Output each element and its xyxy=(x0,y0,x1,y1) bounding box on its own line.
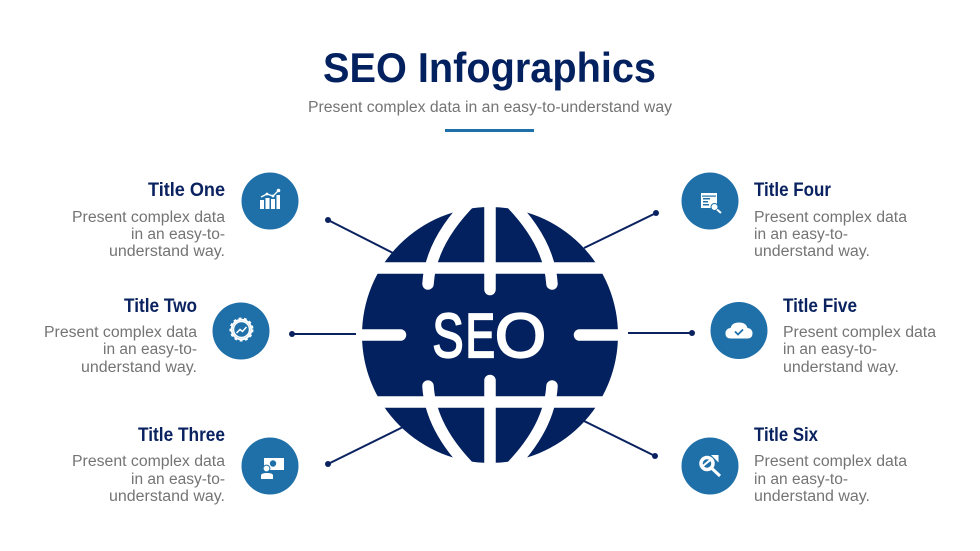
globe with SEO label xyxy=(350,200,630,470)
item: title four xyxy=(754,179,907,260)
icon: magnifier with arrow xyxy=(682,438,738,494)
body text: Present complex data xyxy=(754,453,907,470)
body text xyxy=(783,324,936,376)
connector: title four xyxy=(584,210,659,248)
heading: Title Six xyxy=(754,424,818,446)
subtitle: Present complex data in an easy-to-understand way xyxy=(308,99,672,116)
body text: Present complex data xyxy=(44,324,197,341)
icon: gear with trend xyxy=(212,302,270,360)
body text: understand way. xyxy=(109,243,225,260)
connector: title six xyxy=(584,421,658,459)
body text xyxy=(72,453,225,505)
icon: presenter with screen xyxy=(242,438,298,494)
heading: Title Five xyxy=(783,295,857,317)
connector: title two xyxy=(289,331,356,337)
body text xyxy=(754,453,907,505)
body text: Present complex data xyxy=(72,453,225,470)
body text: Present complex data xyxy=(783,324,936,341)
body text: understand way. xyxy=(783,359,899,376)
connector: title five xyxy=(628,330,695,336)
body text xyxy=(72,209,225,260)
icon: bar chart xyxy=(242,172,298,230)
item: title five xyxy=(783,295,936,376)
heading: Title Two xyxy=(124,295,197,317)
item: title six xyxy=(754,424,907,505)
body text: in an easy-to- xyxy=(131,471,225,488)
body text: in an easy-to- xyxy=(131,226,225,243)
body text: understand way. xyxy=(754,488,870,505)
body text xyxy=(754,209,907,260)
body text: Present complex data xyxy=(72,209,225,226)
item: title two xyxy=(44,295,197,376)
item: title three xyxy=(72,424,225,505)
SEO label xyxy=(432,302,546,371)
title underline xyxy=(445,129,534,132)
SEO label: S xyxy=(432,302,464,371)
connector: title one xyxy=(325,217,393,253)
heading: Title Four xyxy=(754,179,831,201)
icon: browser with search check xyxy=(682,172,738,230)
title: SEO Infographics xyxy=(323,44,656,91)
body text: understand way. xyxy=(754,243,870,260)
body text: in an easy-to- xyxy=(754,471,848,488)
SEO label: O xyxy=(495,302,546,371)
body text xyxy=(44,324,197,376)
body text: understand way. xyxy=(109,488,225,505)
heading: Title One xyxy=(148,179,225,201)
body text: understand way. xyxy=(81,359,197,376)
body text: in an easy-to- xyxy=(783,341,877,358)
icon: cloud with check xyxy=(710,302,768,359)
item: title one xyxy=(72,179,225,260)
SEO label: E xyxy=(466,302,495,371)
body text: in an easy-to- xyxy=(754,226,848,243)
heading: Title Three xyxy=(138,424,225,446)
connector: title three xyxy=(325,427,403,467)
body text: in an easy-to- xyxy=(103,341,197,358)
body text: Present complex data xyxy=(754,209,907,226)
